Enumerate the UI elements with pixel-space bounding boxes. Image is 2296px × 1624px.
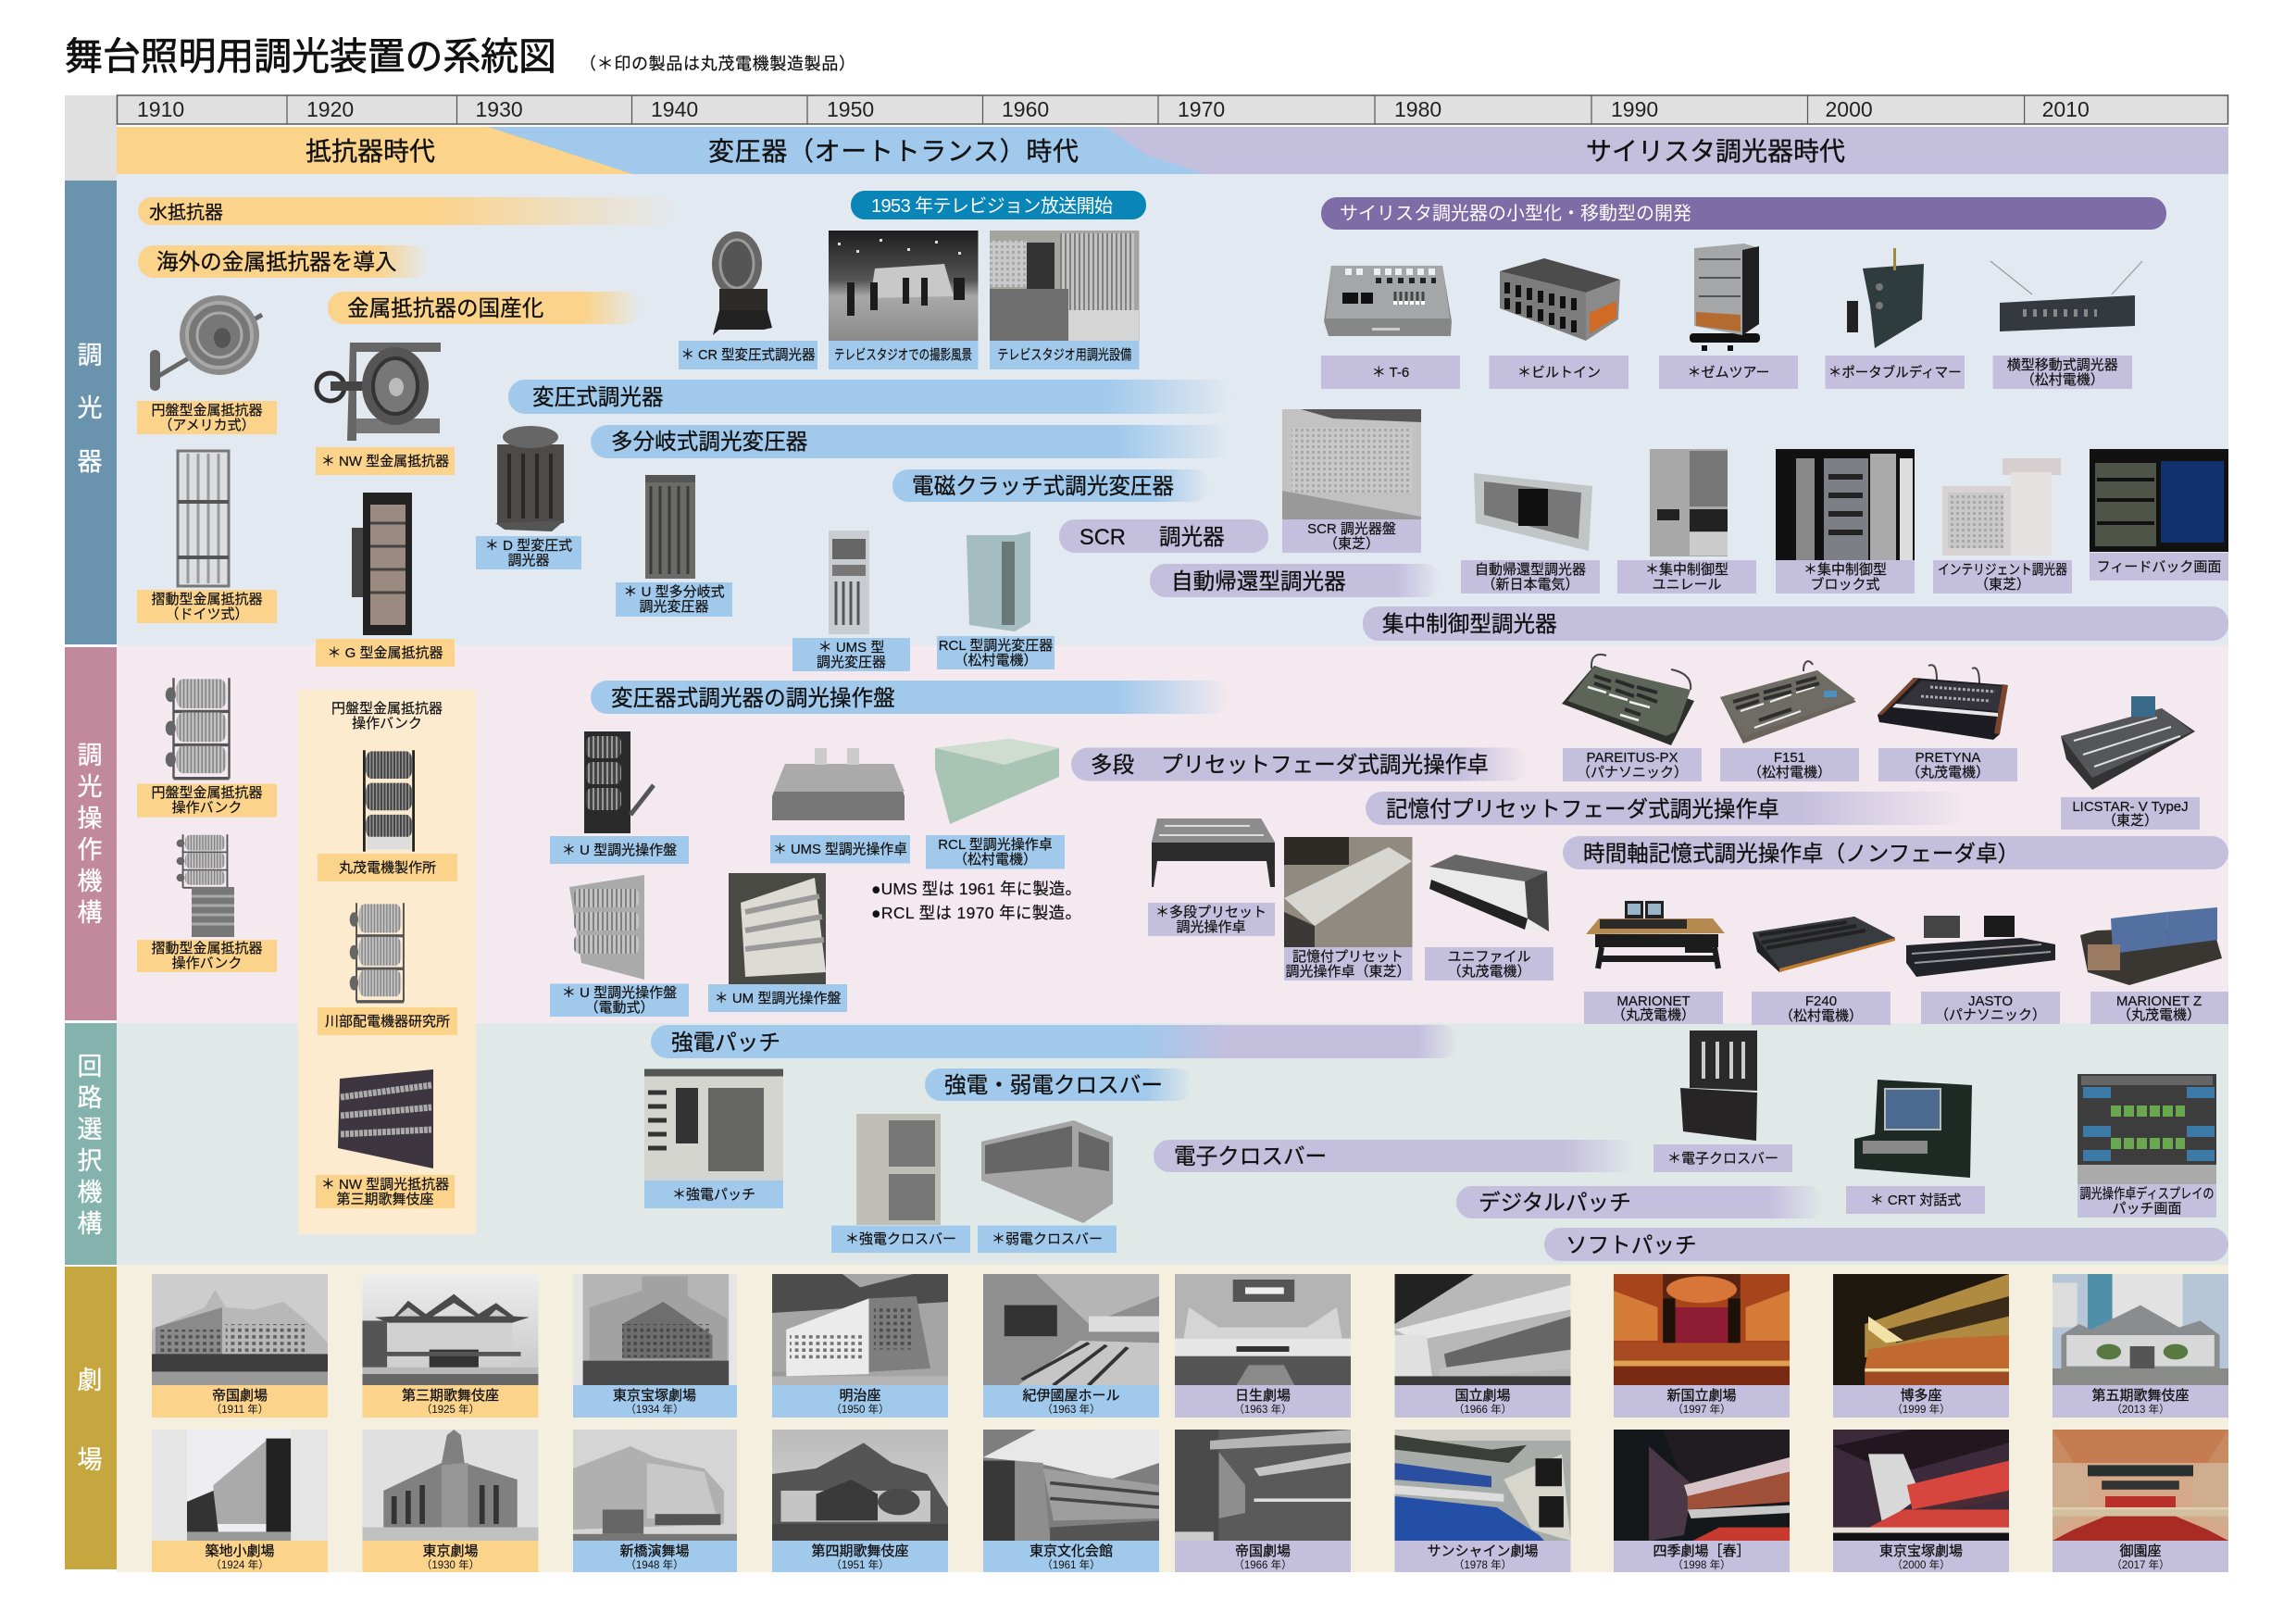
theatre: 帝国劇場 1911: （1911 年） <box>211 1403 268 1416</box>
item: 横型移動式調光器: （松村電機） <box>2021 372 2104 388</box>
item: PRETYNA: PRETYNA <box>1915 750 1980 766</box>
item: T-6 <box>1321 266 1460 389</box>
bar: 変圧器式調光器の調光操作盤 <box>591 681 1230 714</box>
item: 集中制御型ユニレール <box>1617 449 1756 593</box>
item: F151: （松村電機） <box>1748 765 1831 781</box>
item: UMS型調光変圧器: 調光変圧器 <box>817 655 886 670</box>
theatre: 帝国劇場 1966 <box>1175 1430 1351 1572</box>
bar: 記憶付プリセットフェーダ式調光操作卓 <box>1366 792 1968 825</box>
item: 円盤型金属抵抗器: 円盤型金属抵抗器 <box>151 403 263 418</box>
item: U型調光操作盤(電動式): ＊ U 型調光操作盤 <box>562 985 677 1001</box>
photo: テレビスタジオ用調光設備 <box>990 231 1139 369</box>
item: RCL型調光操作卓: RCL 型調光操作卓 <box>938 837 1053 853</box>
theatre: 帝国劇場 1911 <box>152 1274 328 1418</box>
item: U型多分岐式調光変圧器 <box>616 475 732 617</box>
timeline header: 1930 <box>476 97 523 121</box>
item: MARIONET <box>1584 901 1725 1024</box>
side heading: 回路選択機構 <box>65 1023 117 1265</box>
item: F151: F151 <box>1774 750 1805 766</box>
title: 舞台照明用調光装置の系統図 <box>65 35 556 78</box>
theatre: 第五期歌舞伎座 2013 <box>2053 1274 2228 1418</box>
theatre: 築地小劇場 1924: 築地小劇場 <box>205 1543 275 1559</box>
bar: 電磁クラッチ式調光変圧器: 電磁クラッチ式調光変圧器 <box>912 474 1175 499</box>
theatre: 四季劇場［春］1998 <box>1614 1430 1790 1572</box>
item: RCL型調光変圧器 <box>937 531 1054 669</box>
side heading: 調光操作機構: 調 <box>78 742 102 769</box>
item: F240: （松村電機） <box>1779 1008 1863 1024</box>
item: CRT対話式 <box>1846 1080 1985 1214</box>
theatre: 四季劇場［春］1998: （1998 年） <box>1672 1558 1731 1571</box>
theatre: 日生劇場 1963 <box>1175 1274 1351 1418</box>
side heading: 回路選択機構: 構 <box>78 1210 102 1238</box>
theatre: 東京宝塚劇場 2000: 東京宝塚劇場 <box>1879 1543 1963 1559</box>
item: U型多分岐式調光変圧器: 調光変圧器 <box>639 599 709 615</box>
item: NW型金属抵抗器 <box>316 343 455 475</box>
side heading: 回路選択機構: 選 <box>78 1116 102 1143</box>
photo: 記憶付プリセット調光操作卓 <box>1284 837 1413 981</box>
tall panel: 抵抗器操作バンク: 丸茂電機製作所 <box>339 860 436 876</box>
item: 横型移動式調光器 <box>1990 261 2142 389</box>
theatre: 御園座 2017: （2017 年） <box>2111 1558 2170 1571</box>
item: ユニファイル: ユニファイル <box>1447 949 1531 965</box>
item: MARIONET: （丸茂電機） <box>1612 1007 1695 1023</box>
theatre: 東京宝塚劇場 1934: （1934 年） <box>625 1403 684 1416</box>
theatre: 新橋演舞場 1948: 新橋演舞場 <box>619 1543 690 1559</box>
theatre: 帝国劇場 1911: 帝国劇場 <box>212 1388 268 1404</box>
side heading: 調光操作機構: 操 <box>78 805 102 832</box>
item: 自動帰還型調光器: （新日本電気） <box>1481 577 1579 593</box>
bar: 自動帰還型調光器 <box>1150 564 1441 597</box>
bar: 時間軸記憶式調光操作卓: 時間軸記憶式調光操作卓（ノンフェーダ卓） <box>1583 842 2019 867</box>
bar: 変圧式調光器 <box>508 380 1232 414</box>
timeline header: 2000 <box>1826 97 1873 121</box>
side heading: 調光器: 器 <box>78 448 102 476</box>
theatre: 国立劇場 1966: 国立劇場 <box>1454 1388 1511 1404</box>
theatre: サンシャイン劇場 1978 <box>1394 1430 1570 1572</box>
tall panel: 抵抗器操作バンク: 第三期歌舞伎座 <box>336 1192 434 1207</box>
item: ゼムツアー: ＊ゼムツアー <box>1687 365 1770 381</box>
item: F151 <box>1720 661 1859 781</box>
bar: 金属抵抗器の国産化: 金属抵抗器の国産化 <box>347 296 543 321</box>
photo: 強電クロスバー: ＊強電クロスバー <box>845 1231 956 1247</box>
item: G型金属抵抗器: ＊ G 型金属抵抗器 <box>327 645 443 661</box>
theatre: 四季劇場［春］1998: 四季劇場［春］ <box>1653 1543 1751 1559</box>
item: PRETYNA <box>1878 665 2017 781</box>
theatre: 東京宝塚劇場 1934 <box>573 1274 737 1418</box>
bar: SCR調光器 <box>1059 519 1268 553</box>
bar: 電子クロスバー: 電子クロスバー <box>1174 1145 1327 1169</box>
item: U型多分岐式調光変圧器: ＊ U 型多分岐式 <box>623 583 725 600</box>
timeline header: 1970 <box>1178 97 1225 121</box>
tall panel: 抵抗器操作バンク: ＊ NW 型調光抵抗器 <box>321 1177 449 1193</box>
bar: 電磁クラッチ式調光変圧器 <box>892 469 1210 502</box>
theatre: 博多座 1999: （1999 年） <box>1891 1403 1951 1416</box>
item: 摺動型金属抵抗器: 摺動型金属抵抗器 <box>151 592 263 607</box>
item: G型金属抵抗器 <box>316 493 455 667</box>
item: パッチ画面 <box>2078 1074 2216 1218</box>
item: フィードバック画面: フィードバック画面 <box>2097 559 2221 575</box>
item: MARIONET Z <box>2080 907 2228 1024</box>
theatre: 帝国劇場 1966: 帝国劇場 <box>1235 1543 1291 1559</box>
timeline header: 2010 <box>2042 97 2090 121</box>
item: 摺動型金属抵抗器操作バンク: 操作バンク <box>172 956 242 971</box>
bar: ソフトパッチ <box>1544 1228 2228 1261</box>
item: 集中制御型ユニレール: ＊集中制御型 <box>1645 562 1728 578</box>
item: 摺動型金属抵抗器 <box>137 451 277 623</box>
theatre: 東京文化会館 1961: （1961 年） <box>1042 1558 1101 1571</box>
era band: 変圧器（オートトランス）時代 <box>708 137 1079 166</box>
item: 自動帰還型調光器 <box>1461 473 1600 593</box>
side heading: 調光操作機構 <box>65 647 117 1020</box>
item: UM型調光操作盤 <box>708 873 847 1012</box>
timeline header: 1910 <box>137 97 184 121</box>
item: 摺動型金属抵抗器: （ドイツ式） <box>165 606 249 622</box>
theatre: サンシャイン劇場 1978: サンシャイン劇場 <box>1427 1543 1539 1559</box>
item: 横型移動式調光器: 横型移動式調光器 <box>2007 357 2118 373</box>
theatre: 日生劇場 1963: 日生劇場 <box>1235 1388 1291 1404</box>
item: 多段プリセット調光操作卓: ＊多段プリセット <box>1155 904 1267 920</box>
item: UMS型調光操作卓: ＊ UMS 型調光操作卓 <box>773 842 907 857</box>
item: RCL型調光変圧器: （松村電機） <box>954 653 1038 668</box>
timeline header <box>65 95 2227 181</box>
panel: 調光操作機構 <box>137 655 2228 1234</box>
theatre: 東京文化会館 1961 <box>983 1430 1159 1572</box>
side heading: 調光操作機構: 機 <box>78 868 102 895</box>
theatre: 東京劇場 1930: （1930 年） <box>421 1558 480 1571</box>
item: ユニファイル <box>1425 855 1554 981</box>
photo: 記憶付プリセット調光操作卓: 調光操作卓（東芝） <box>1285 964 1411 980</box>
item: 円盤型金属抵抗器操作バンク: 円盤型金属抵抗器 <box>151 785 263 801</box>
bar: 強電・弱電クロスバー: 強電・弱電クロスバー <box>944 1073 1163 1098</box>
item: UMS型調光変圧器 <box>792 531 910 671</box>
item: D型変圧式調光器 <box>476 426 581 569</box>
item: 摺動型金属抵抗器操作バンク: 摺動型金属抵抗器 <box>151 941 263 956</box>
side heading: 劇場: 劇 <box>78 1367 102 1394</box>
item: パッチ画面: パッチ画面 <box>2112 1201 2182 1217</box>
item: インテリジェント調光器: （東芝） <box>1975 577 2030 593</box>
bar: SCR調光器: 調光器 <box>1159 525 1225 550</box>
item: RCL型調光操作卓: （松村電機） <box>954 852 1037 868</box>
tall panel: 抵抗器操作バンク <box>298 690 476 1234</box>
theatre: 東京文化会館 1961: 東京文化会館 <box>1029 1543 1113 1559</box>
era band <box>117 127 2228 174</box>
side heading: 回路選択機構: 路 <box>78 1084 102 1112</box>
timeline header: 1950 <box>827 97 874 121</box>
item: LICSTAR-V TypeJ: LICSTAR- V TypeJ <box>2072 799 2189 815</box>
bar: ソフトパッチ: ソフトパッチ <box>1566 1234 1697 1258</box>
theatre: 新橋演舞場 1948 <box>573 1430 737 1572</box>
item: LICSTAR-V TypeJ <box>2061 696 2200 830</box>
item: 円盤型金属抵抗器操作バンク <box>137 678 277 818</box>
item: 集中制御型ブロック式: ブロック式 <box>1810 576 1880 593</box>
note: 製造年: ●UMS 型は 1961 年に製造。 <box>871 880 1081 898</box>
theatre: 博多座 1999 <box>1833 1274 2009 1418</box>
bar: サイリスタ調光器の小型化・移動型の開発 <box>1321 197 2166 230</box>
photo: 記憶付プリセット調光操作卓: 記憶付プリセット <box>1292 949 1404 965</box>
theatre: 東京宝塚劇場 2000 <box>1833 1430 2009 1572</box>
item: PRETYNA: （丸茂電機） <box>1906 765 1990 781</box>
item: 円盤型金属抵抗器: （アメリカ式） <box>158 418 256 433</box>
bar: 記憶付プリセットフェーダ式調光操作卓: 記憶付プリセットフェーダ式調光操作卓 <box>1386 797 1779 822</box>
timeline header: 1940 <box>651 97 698 121</box>
theatre: 第四期歌舞伎座 1951 <box>772 1430 948 1572</box>
item: ゼムツアー <box>1659 244 1798 389</box>
bar: 多段プリセットフェーダ式調光操作卓 <box>1071 748 1529 781</box>
bar: 多分岐式調光変圧器: 多分岐式調光変圧器 <box>611 430 808 455</box>
item: CR型変圧式調光器: ＊ CR 型変圧式調光器 <box>681 347 815 363</box>
item: 多段プリセット調光操作卓: 調光操作卓 <box>1176 919 1246 935</box>
bar: 自動帰還型調光器: 自動帰還型調光器 <box>1171 569 1346 594</box>
photo: テレビスタジオでの撮影風景: テレビスタジオでの撮影風景 <box>834 346 972 363</box>
panel backgrounds <box>117 174 2228 1572</box>
era band: 抵抗器時代 <box>306 137 435 166</box>
item: UM型調光操作盤: ＊ UM 型調光操作盤 <box>715 991 841 1006</box>
bar: デジタルパッチ <box>1456 1186 1825 1218</box>
photo: 強電パッチ <box>644 1068 783 1208</box>
bar: 時間軸記憶式調光操作卓 <box>1563 836 2228 869</box>
item: 自動帰還型調光器: 自動帰還型調光器 <box>1475 561 1586 578</box>
theatre: 御園座 2017 <box>2053 1430 2228 1572</box>
subtitle note: （＊印の製品は丸茂電機製造製品） <box>580 55 855 73</box>
theatre: 御園座 2017: 御園座 <box>2119 1543 2162 1559</box>
callout: 1953年テレビジョン放送開始 <box>851 191 1146 219</box>
theatre: 東京宝塚劇場 2000: （2000 年） <box>1891 1558 1951 1571</box>
bar: 多段プリセットフェーダ式調光操作卓: 多段 <box>1091 753 1134 778</box>
theatre: 第三期歌舞伎座 1925: 第三期歌舞伎座 <box>402 1388 499 1404</box>
callout: 1953年テレビジョン放送開始: 1953 年テレビジョン放送開始 <box>871 195 1113 217</box>
theatre: 東京劇場 1930 <box>363 1430 539 1572</box>
item: MARIONET Z: （丸茂電機） <box>2117 1007 2201 1023</box>
item: RCL型調光変圧器: RCL 型調光変圧器 <box>939 638 1053 654</box>
timeline header: 1990 <box>1611 97 1658 121</box>
theatre: サンシャイン劇場 1978: （1978 年） <box>1454 1558 1512 1571</box>
item: SCR調光器盤: SCR 調光器盤 <box>1307 521 1396 537</box>
item: D型変圧式調光器: ＊ D 型変圧式 <box>485 538 572 554</box>
item: MARIONET Z: MARIONET Z <box>2116 993 2202 1009</box>
side heading: 調光器 <box>65 181 117 644</box>
bar: サイリスタ調光器の小型化・移動型の開発: サイリスタ調光器の小型化・移動型の開発 <box>1340 203 1691 224</box>
theatre: 第四期歌舞伎座 1951: 第四期歌舞伎座 <box>811 1543 909 1559</box>
bar: 集中制御型調光器: 集中制御型調光器 <box>1382 612 1557 637</box>
item: NW型金属抵抗器: ＊ NW 型金属抵抗器 <box>321 454 449 469</box>
item: D型変圧式調光器: 調光器 <box>507 553 550 568</box>
side heading: 劇場: 場 <box>78 1446 102 1474</box>
item: CR型変圧式調光器 <box>679 231 817 369</box>
tall panel: 抵抗器操作バンク: 川部配電機器研究所 <box>325 1014 450 1030</box>
theatre: 東京宝塚劇場 1934: 東京宝塚劇場 <box>613 1388 696 1404</box>
item: PAREITUS-PX: PAREITUS-PX <box>1587 750 1678 766</box>
side heading: 調光操作機構: 作 <box>78 836 102 864</box>
bar: 海外の金属抵抗器を導入 <box>138 245 429 278</box>
note: 製造年: ●RCL 型は 1970 年に製造。 <box>871 904 1081 922</box>
theatre: 第四期歌舞伎座 1951: （1951 年） <box>830 1558 890 1571</box>
bar: SCR調光器: SCR <box>1079 526 1126 550</box>
note: 製造年 <box>871 880 1081 922</box>
bar: 水抵抗器 <box>138 197 677 225</box>
item: フィードバック画面 <box>2090 449 2228 581</box>
side heading: 調光操作機構: 構 <box>78 899 102 927</box>
item: JASTO <box>1906 916 2060 1024</box>
theatre: 帝国劇場 1966: （1966 年） <box>1233 1558 1292 1571</box>
item: ビルトイン: ＊ビルトイン <box>1517 365 1601 381</box>
item: PAREITUS-PX <box>1562 655 1702 781</box>
photo: テレビスタジオ用調光設備: テレビスタジオ用調光設備 <box>997 347 1131 363</box>
theatre: 第五期歌舞伎座 2013: 第五期歌舞伎座 <box>2091 1388 2190 1404</box>
item: 電子クロスバー <box>1653 1031 1792 1172</box>
photo: 強電パッチ: ＊強電パッチ <box>672 1187 755 1203</box>
bar: 電子クロスバー <box>1154 1140 1637 1172</box>
bar: 変圧式調光器: 変圧式調光器 <box>532 385 664 410</box>
item: 多段プリセット調光操作卓 <box>1148 818 1275 936</box>
timeline header: 1960 <box>1002 97 1049 121</box>
item: U型調光操作盤(電動式): （電動式） <box>584 1000 655 1016</box>
item: ポータブルディマー <box>1826 248 1965 389</box>
bar: 多分岐式調光変圧器 <box>591 425 1231 458</box>
bar: 海外の金属抵抗器を導入: 海外の金属抵抗器を導入 <box>156 250 397 275</box>
item: インテリジェント調光器 <box>1933 458 2072 593</box>
era band: サイリスタ調光器時代 <box>1586 137 1845 166</box>
item: インテリジェント調光器: インテリジェント調光器 <box>1938 562 2067 578</box>
bar: 集中制御型調光器 <box>1363 606 2228 641</box>
item: 円盤型金属抵抗器 <box>137 295 277 434</box>
bar: デジタルパッチ: デジタルパッチ <box>1479 1191 1631 1216</box>
side heading: 調光操作機構: 光 <box>78 773 102 801</box>
side heading: 調光器: 光 <box>78 394 102 422</box>
photo: 強電クロスバー <box>831 1114 970 1253</box>
theatre: 第五期歌舞伎座 2013: （2013 年） <box>2111 1403 2170 1416</box>
item: LICSTAR-V TypeJ: （東芝） <box>2103 813 2158 829</box>
item: 集中制御型ブロック式: ＊集中制御型 <box>1803 562 1887 578</box>
item: UMS型調光変圧器: ＊ UMS 型 <box>818 640 884 656</box>
timeline header: 1980 <box>1394 97 1441 121</box>
theatre: 第三期歌舞伎座 1925 <box>363 1274 539 1418</box>
item: MARIONET: MARIONET <box>1616 993 1691 1009</box>
item: ビルトイン <box>1489 258 1628 389</box>
theatre: 博多座 1999: 博多座 <box>1900 1387 1942 1404</box>
theatre: 新国立劇場 1997 <box>1614 1274 1790 1418</box>
item: ポータブルディマー: ＊ポータブルディマー <box>1828 364 1962 381</box>
timeline header: 1920 <box>306 97 354 121</box>
item: SCR調光器盤: （東芝） <box>1324 536 1379 552</box>
side heading: 調光器: 調 <box>78 342 102 369</box>
theatre: 明治座 1950: （1950 年） <box>830 1403 890 1416</box>
tall panel: 抵抗器操作バンク: 円盤型金属抵抗器 <box>331 701 443 717</box>
theatre: 日生劇場 1963: （1963 年） <box>1233 1403 1292 1416</box>
theatre: 紀伊國屋ホール 1963 <box>983 1274 1159 1418</box>
theatre: 明治座 1950 <box>772 1274 948 1418</box>
item: 円盤型金属抵抗器操作バンク: 操作バンク <box>172 800 242 816</box>
bar: 多段プリセットフェーダ式調光操作卓: プリセットフェーダ式調光操作卓 <box>1161 753 1489 778</box>
item: SCR調光器盤 <box>1282 409 1421 553</box>
theatre: 築地小劇場 1924 <box>152 1430 328 1572</box>
item: 弱電クロスバー <box>978 1120 1117 1253</box>
photo: テレビスタジオでの撮影風景 <box>829 231 978 369</box>
theatre: 国立劇場 1966: （1966 年） <box>1454 1403 1512 1416</box>
theatre: 紀伊國屋ホール 1963: 紀伊國屋ホール <box>1022 1388 1120 1404</box>
item: JASTO: （パナソニック） <box>1935 1007 2046 1023</box>
bar: 金属抵抗器の国産化 <box>328 292 641 324</box>
theatre: 新橋演舞場 1948: （1948 年） <box>625 1558 684 1571</box>
theatre: 新国立劇場 1997: 新国立劇場 <box>1666 1388 1737 1404</box>
panel: 回路選択機構 <box>644 1025 2228 1261</box>
item: 集中制御型ユニレール: ユニレール <box>1652 577 1722 593</box>
item: ユニファイル: （丸茂電機） <box>1447 964 1531 980</box>
item: 摺動型金属抵抗器操作バンク <box>137 834 277 972</box>
tall panel: 抵抗器操作バンク: 操作バンク <box>352 716 422 731</box>
item: JASTO: JASTO <box>1968 993 2013 1009</box>
item: F240: F240 <box>1805 993 1837 1009</box>
item: U型調光操作盤: ＊ U 型調光操作盤 <box>562 843 677 858</box>
item: T-6: ＊ T-6 <box>1372 365 1409 381</box>
bar: 強電パッチ <box>651 1025 1459 1058</box>
side heading: 回路選択機構: 択 <box>78 1147 102 1175</box>
item: 弱電クロスバー: ＊弱電クロスバー <box>992 1231 1103 1247</box>
theatre: 東京劇場 1930: 東京劇場 <box>422 1543 479 1559</box>
item: CRT対話式: ＊ CRT 対話式 <box>1870 1193 1961 1208</box>
side heading: 劇場 <box>65 1267 117 1569</box>
panel: 調光器 <box>137 191 2228 671</box>
side heading: 回路選択機構: 機 <box>78 1179 102 1206</box>
theatre: 第三期歌舞伎座 1925: （1925 年） <box>421 1403 480 1416</box>
item: パッチ画面: 調光操作卓ディスプレイの <box>2079 1185 2215 1202</box>
theatre: 国立劇場 1966 <box>1394 1274 1570 1418</box>
theatre: 築地小劇場 1924: （1924 年） <box>210 1558 269 1571</box>
theatre: 紀伊國屋ホール 1963: （1963 年） <box>1042 1403 1101 1416</box>
item: F240 <box>1752 917 1895 1025</box>
bar: 変圧器式調光器の調光操作盤: 変圧器式調光器の調光操作盤 <box>611 686 895 711</box>
side heading: 回路選択機構: 回 <box>78 1053 102 1081</box>
theatre: 新国立劇場 1997: （1997 年） <box>1672 1403 1731 1416</box>
item: 電子クロスバー: ＊電子クロスバー <box>1667 1151 1778 1167</box>
item: RCL型調光操作卓 <box>926 739 1065 868</box>
item: U型調光操作盤 <box>550 731 689 864</box>
item: 集中制御型ブロック式 <box>1776 449 1915 593</box>
bar: 水抵抗器: 水抵抗器 <box>149 202 223 223</box>
item: PAREITUS-PX: （パナソニック） <box>1577 765 1688 781</box>
item: U型調光操作盤(電動式) <box>550 875 689 1017</box>
bar: 強電パッチ: 強電パッチ <box>671 1031 780 1056</box>
bar: 強電・弱電クロスバー <box>925 1068 1193 1101</box>
item: UMS型調光操作卓 <box>770 748 910 863</box>
panel: 劇場 <box>152 1274 2228 1572</box>
theatre: 明治座 1950: 明治座 <box>839 1388 881 1404</box>
